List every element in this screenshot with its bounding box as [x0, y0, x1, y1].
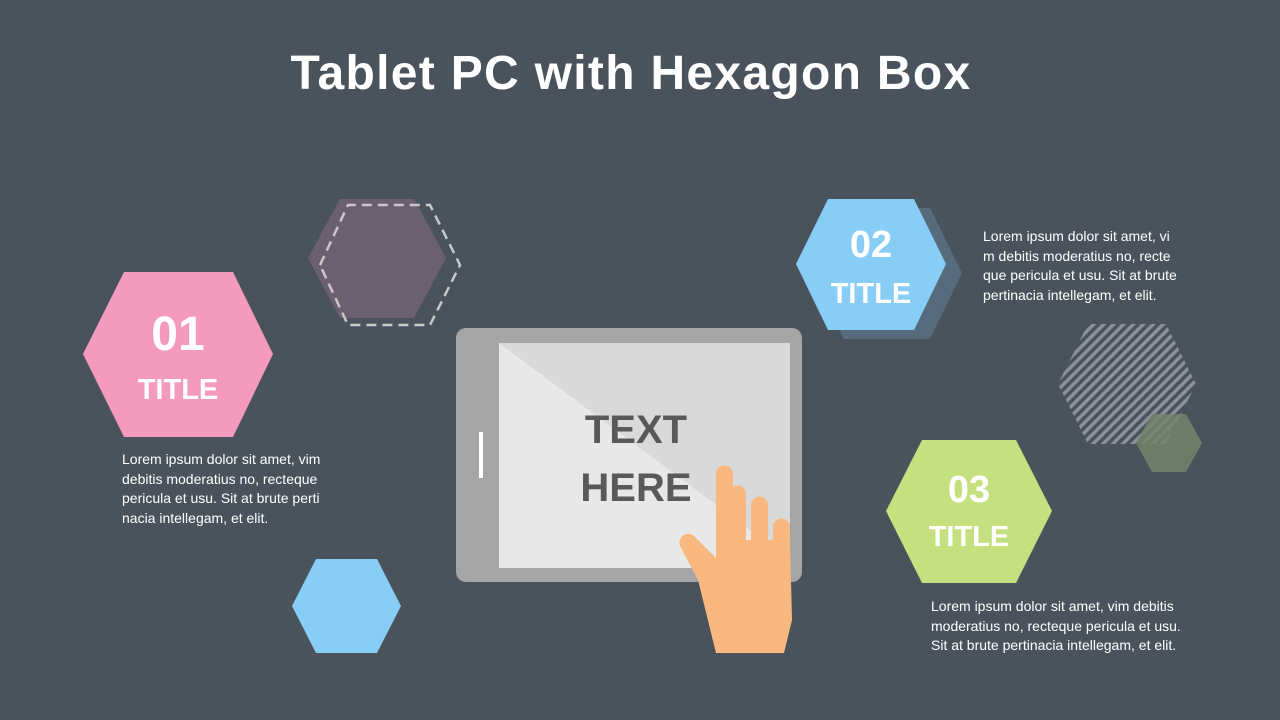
hexagon: small green	[1136, 414, 1202, 472]
hexagon 03	[886, 440, 1052, 583]
hexagon 01: 01	[151, 308, 205, 361]
text block 03: Sit at brute pertinacia intellegam, et elit.	[931, 637, 1176, 653]
tablet: TEXT	[585, 408, 687, 452]
text block 01: Lorem ipsum dolor sit amet, vim	[122, 451, 320, 467]
hexagon 02: 02	[850, 224, 892, 266]
hexagon: striped decorative	[1058, 324, 1196, 444]
text block 03: Lorem ipsum dolor sit amet, vim debitis	[931, 598, 1174, 614]
text block 02: Lorem ipsum dolor sit amet, vi	[983, 228, 1170, 244]
text block 03: moderatius no, recteque pericula et usu.	[931, 618, 1181, 634]
tablet: HERE	[580, 466, 692, 510]
hexagon 01: TITLE	[138, 374, 218, 406]
hexagon: dashed decorative	[308, 199, 460, 325]
text block 01: debitis moderatius no, recteque	[122, 470, 317, 486]
hexagon 03: TITLE	[929, 521, 1009, 553]
hexagon 02	[796, 199, 962, 339]
hexagon 02: TITLE	[831, 278, 911, 310]
text block 03	[931, 598, 1181, 653]
tablet	[456, 328, 802, 582]
text block 01	[122, 451, 320, 526]
icon: hand	[679, 466, 792, 653]
text block 02: m debitis moderatius no, recte	[983, 248, 1171, 264]
hexagon 03: 03	[948, 469, 990, 511]
text block 02: pertinacia intellegam, et elit.	[983, 286, 1157, 302]
text block 02: que pericula et usu. Sit at brute	[983, 267, 1177, 283]
hexagon: small blue	[292, 559, 401, 653]
title: Tablet PC with Hexagon Box	[290, 47, 971, 100]
text block 02	[983, 228, 1177, 303]
text block 01: nacia intellegam, et elit.	[122, 510, 268, 526]
hexagon 01	[83, 272, 273, 437]
text block 01: pericula et usu. Sit at brute perti	[122, 490, 320, 506]
